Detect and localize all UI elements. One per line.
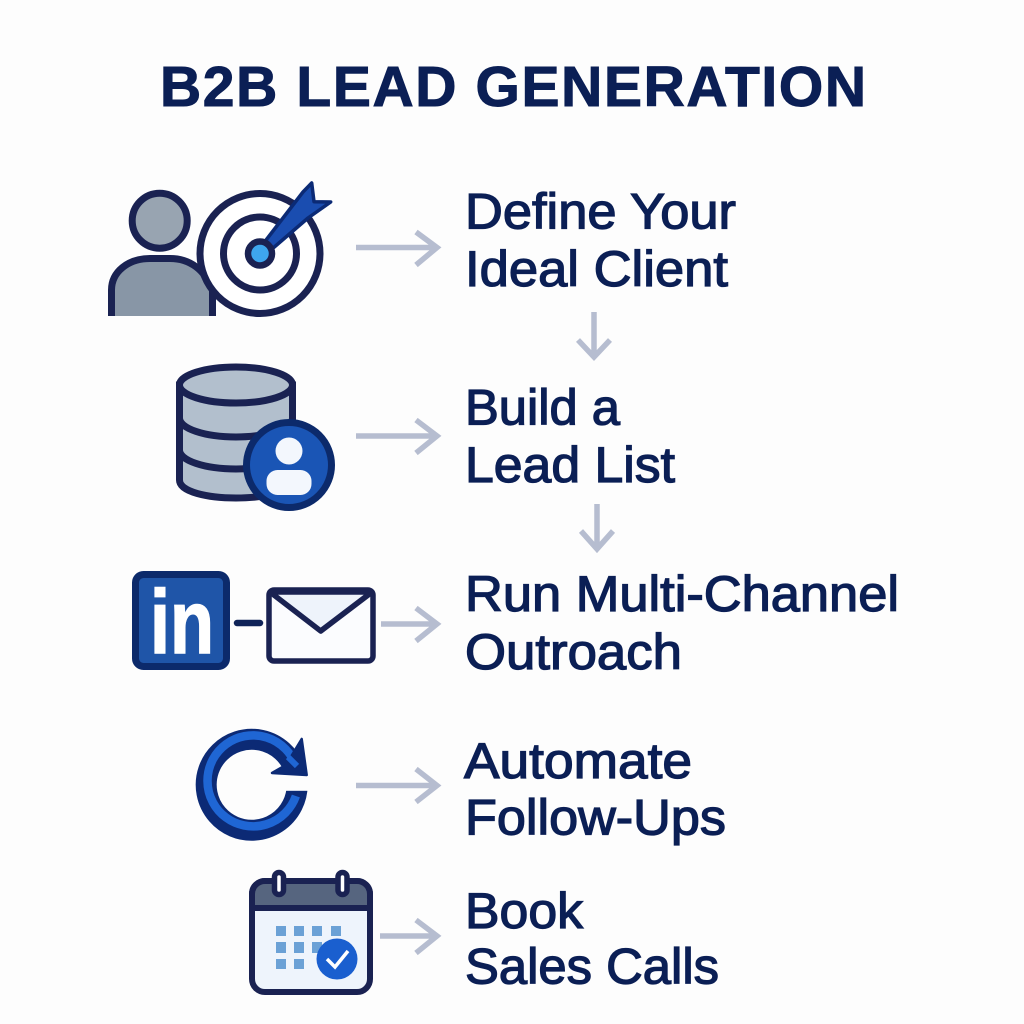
step 5 label: Sales Calls (465, 938, 719, 994)
icon: refresh cycle (206, 735, 316, 830)
step 4: automate follow-ups (206, 732, 726, 846)
icon: linkedin and envelope: in (150, 573, 214, 673)
step 2 label: Lead List (465, 436, 675, 493)
step 4 label: Automate (464, 732, 692, 789)
arrow: icon to text (356, 420, 437, 453)
step 2 label (465, 378, 675, 493)
step 2 label: Build a (465, 378, 621, 436)
arrow: icon to text (381, 608, 437, 641)
step 1 label: Ideal Client (465, 240, 728, 297)
arrow: icon to text (356, 232, 437, 265)
icon: calendar with check (252, 872, 370, 992)
icon: database with user badge (180, 367, 332, 508)
step 4 label (464, 732, 726, 846)
step 4 label: Follow-Ups (465, 788, 726, 846)
step 5: book sales calls (252, 872, 719, 994)
arrow: step 1 to step 2 (578, 312, 610, 357)
step 3: run multi-channel outreach (136, 565, 899, 680)
step 1: define your ideal client (112, 182, 736, 316)
step 3 label: Outroach (465, 623, 682, 680)
arrow: icon to text (380, 920, 437, 953)
step 5 label: Book (465, 882, 584, 939)
icon: linkedin and envelope (136, 573, 373, 673)
step 5 label (465, 882, 719, 994)
arrow: step 2 to step 3 (581, 504, 613, 549)
step 2: build a lead list (180, 367, 675, 508)
step 3 label: Run Multi-Channel (465, 565, 899, 622)
step 1 label (465, 182, 736, 297)
step 1 label: Define Your (465, 182, 736, 240)
arrow: icon to text (356, 769, 437, 802)
icon: person with target (112, 183, 331, 316)
title: B2B LEAD GENERATION (160, 55, 866, 119)
step 3 label (465, 565, 899, 680)
